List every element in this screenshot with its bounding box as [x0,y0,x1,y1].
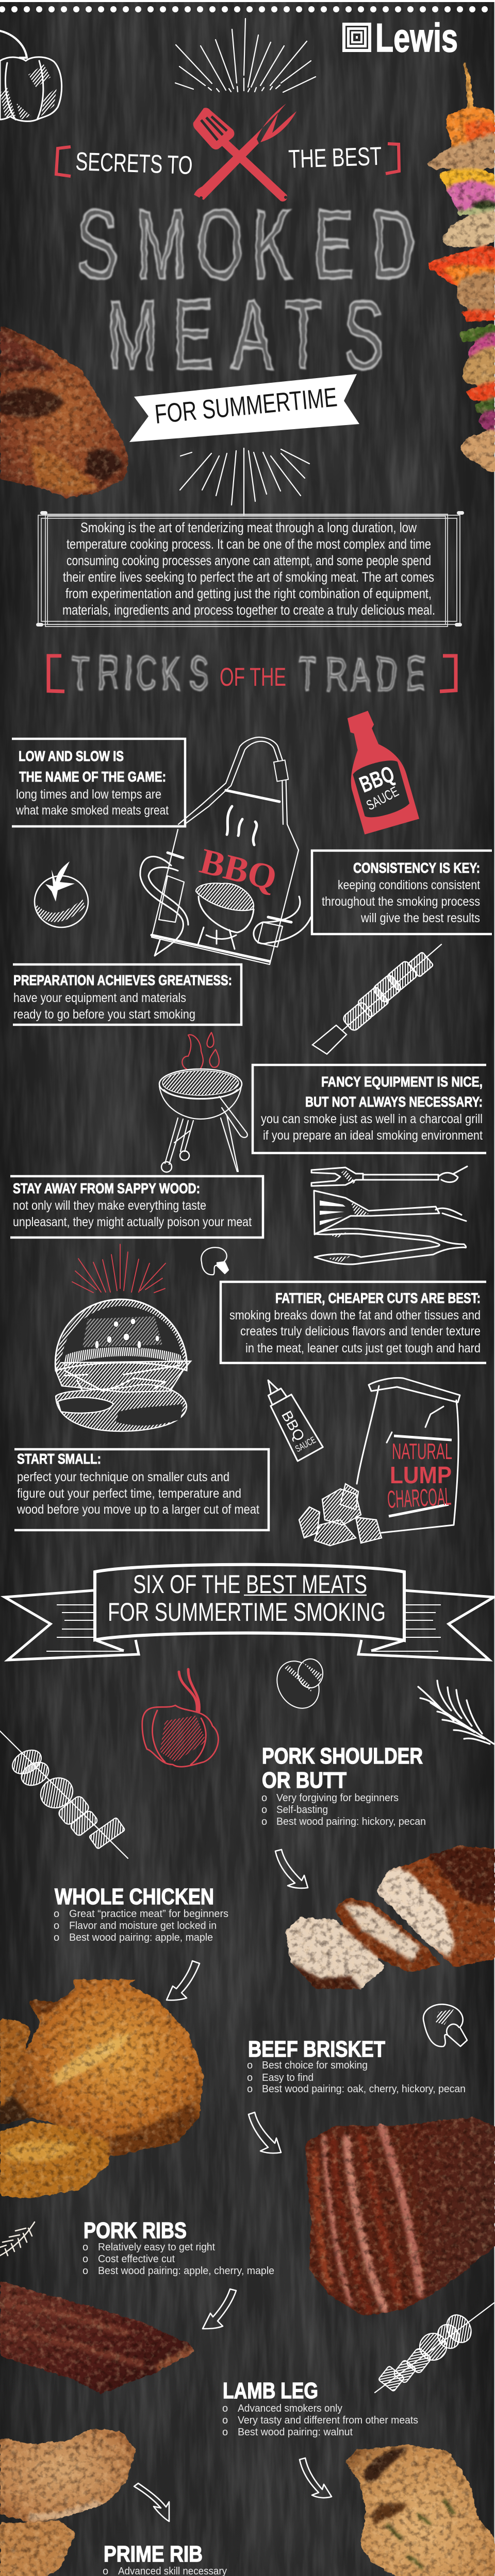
intro paragraph [62,520,435,618]
text: beef brisket: BEEF BRISKET [248,2037,385,2062]
red heading brackets [48,656,456,691]
logo: Lewis: Lewis [375,15,458,60]
text: beef brisket: Best choice for smoking [262,2060,368,2071]
panel: start small [14,1449,269,1530]
arrow to chicken [167,1961,200,2000]
red right bracket [386,144,399,174]
photo: prime rib cuts [0,2428,136,2576]
icon: white tomato [35,861,88,927]
arrow to prime rib text [134,2483,169,2521]
icon: squeeze bottle of BBQ sauce: SAUCE [293,1435,318,1454]
text: pork shoulder or butt: Very forgiving for beginners [276,1792,399,1804]
panel: low and slow [12,739,185,826]
subtitle: secrets to the best: THE BEST [288,142,382,174]
text: whole chicken: o [54,1908,59,1920]
text: whole chicken [54,1884,228,1943]
panel: low and slow: what make smoked meats great [15,803,169,818]
text: beef brisket: o [247,2060,253,2071]
panel: stay away from sappy wood: not only will they make everything taste [13,1198,206,1213]
text: lamb leg: LAMB LEG [223,2378,318,2403]
intro paragraph: Smoking is the art of tenderizing meat through a long duration, low [80,520,417,535]
text: pork ribs [82,2218,274,2277]
title: smoked meats in smoke lettering: SMOKED [77,190,415,299]
text: lamb leg: Advanced smokers only [238,2403,342,2414]
text: pork ribs: o [82,2253,88,2265]
photo: herbed lamb leg [345,2444,495,2576]
banner: for summertime: FOR SUMMERTIME [154,382,339,430]
panel: stay away from sappy wood [10,1176,263,1238]
panel: start small: START SMALL: [17,1451,101,1467]
subtitle: secrets to the best [56,142,399,180]
text: pork ribs: o [82,2265,88,2277]
arrow to lamb [300,2458,332,2498]
text: pork ribs: o [82,2242,88,2253]
text: whole chicken: Best wood pairing: apple, maple [69,1932,213,1943]
text: pork ribs: Cost effective cut [98,2253,175,2265]
text: pork shoulder or butt: Self-basting [276,1804,328,1816]
icon: white olive [269,1653,327,1716]
icon: squeeze bottle of BBQ sauce: BBQ [278,1408,308,1444]
text: prime rib: PRIME RIB [104,2541,203,2567]
icon: white skewer right [375,2303,494,2393]
icon: white burger [55,1299,191,1431]
red flames [182,1032,219,1074]
text: whole chicken: o [54,1932,59,1943]
icon: white bell pepper [0,31,62,121]
photo: pork ribs [0,2281,194,2394]
icon: natural lump charcoal bag: LUMP [390,1462,452,1488]
text: pork shoulder or butt: o [261,1792,267,1804]
panel: preparation achieves greatness: ready to go before you start smoking [13,1007,195,1022]
text: beef brisket: o [247,2072,253,2083]
text: pork ribs: Relatively easy to get right [98,2242,215,2253]
text: whole chicken: o [54,1920,59,1931]
icon: grilling spatula [314,1191,466,1234]
icon: red burst above burger [72,1244,166,1293]
arrow to pork [275,1850,308,1888]
heading: tricks of the trade: TRICKS [71,647,209,700]
charcoal lumps [299,1484,382,1546]
title: smoked meats in smoke lettering [77,190,415,389]
icon: sunburst below banner [180,448,309,515]
heading: tricks of the trade: TRADE [299,648,425,701]
apron flame squiggles [227,806,257,845]
icon: white skewer left [0,1731,128,1858]
icon: smoked meat kebab photo [426,60,495,473]
icon: grilling fork [311,1166,467,1186]
panel: preparation achieves greatness: PREPARATION ACHIEVES GREATNESS: [13,972,232,988]
icon: BBQ apron [140,737,311,964]
banner: six of the best meats: FOR SUMMERTIME SMOKING [108,1598,386,1626]
text: beef brisket [247,2037,466,2095]
banner: for summertime [129,374,359,442]
icon: white mushroom [423,2004,467,2046]
panel: low and slow: long times and low temps are [16,787,161,802]
icon: natural lump charcoal bag [299,1378,460,1546]
text: lamb leg: o [222,2415,228,2426]
text: lamb leg: Best wood pairing: walnut [238,2427,353,2438]
text: pork shoulder or butt: PORK SHOULDER [262,1743,423,1769]
text: pork shoulder or butt: Best wood pairing: hickory, pecan [276,1816,426,1827]
photo: sliced beef brisket [305,2117,495,2316]
panel: consistency is key: will give the best results [360,911,480,925]
text: pork ribs: Best wood pairing: apple, cherry, maple [98,2265,274,2277]
text: lamb leg: o [222,2427,228,2438]
small grill on apron [196,883,254,949]
text: beef brisket: o [247,2083,253,2095]
text: pork shoulder or butt: o [261,1804,267,1816]
text: lamb leg: Very tasty and different from other meats [238,2415,418,2426]
icon: grilled steak photo [0,325,129,498]
apron BBQ lettering: BBQ [196,841,280,899]
text: pork shoulder or butt: OR BUTT [262,1768,346,1793]
arrow to ribs [203,2289,236,2329]
panel: start small: wood before you move up to a larger cut of meat [16,1502,259,1517]
panel: intro text box [36,511,464,626]
text: beef brisket: Easy to find [262,2072,314,2083]
heading: tricks of the trade: OF THE [220,663,286,691]
panel: stay away from sappy wood: unpleasant, they might actually poison your meat [13,1215,252,1229]
panel: low and slow: LOW AND SLOW IS [19,748,124,764]
icon: red bell pepper [142,1669,218,1767]
icon: red BBQ sauce bottle: SAUCE [364,784,401,813]
title: smoked meats in smoke lettering: MEATS [107,280,384,389]
icon: grilling tongs [315,1229,466,1264]
top edge strip and dotted border [0,0,495,12]
icon: rosemary sprig left [0,2222,35,2256]
panel: start small: perfect your technique on smaller cuts and [17,1470,229,1484]
text: lamb leg: o [222,2403,228,2414]
panel: consistency is key [312,851,492,934]
banner: six of the best meats: SIX OF THE BEST MEATS [133,1570,367,1599]
photo: sliced pork roast [286,1846,495,1989]
icon: sunburst above title [175,19,316,92]
arrow to brisket [249,2112,281,2153]
logo: Lewis [342,15,458,60]
icon: kettle grill with red flames [159,1032,248,1172]
icon: red BBQ sauce bottle: BBQ [356,761,398,798]
panel: start small: figure out your perfect time, temperature and [17,1486,241,1501]
icon: squeeze bottle of BBQ sauce [256,1372,323,1461]
icon: white kebab with wooden handle [312,944,441,1054]
panel: low and slow: THE NAME OF THE GAME: [19,769,166,785]
subtitle: secrets to the best: SECRETS TO [75,147,193,180]
text: lamb leg [222,2378,418,2438]
text: pork ribs: PORK RIBS [84,2218,187,2243]
text: pork shoulder or butt: o [261,1816,267,1827]
text: pork shoulder or butt [261,1743,426,1827]
icon: red BBQ sauce bottle [332,705,419,835]
icon: natural lump charcoal bag: NATURAL [392,1439,452,1464]
panel: fattier cheaper cuts [221,1282,486,1363]
red left bracket [56,147,71,176]
banner: six of the best meats [5,1565,494,1660]
photo: whole roasted chicken [0,1979,204,2198]
text: beef brisket: Best wood pairing: oak, cherry, hickory, pecan [262,2083,466,2095]
panel: stay away from sappy wood: STAY AWAY FROM SAPPY WOOD: [13,1180,200,1196]
panel: preparation achieves greatness [13,964,241,1025]
icon: crossed spatula and fork [193,104,296,201]
text: prime rib [103,2541,284,2576]
icon: white mushroom small [201,1247,228,1275]
heading: tricks of the trade [48,647,456,701]
icon: rosemary sprig [418,1681,494,1744]
panel: fancy equipment [253,1065,486,1153]
text: whole chicken: Flavor and moisture get locked in [69,1920,217,1931]
text: whole chicken: Great “practice meat” for beginners [69,1908,228,1920]
text: whole chicken: WHOLE CHICKEN [55,1884,214,1909]
panel: preparation achieves greatness: have your equipment and materials [13,991,186,1005]
